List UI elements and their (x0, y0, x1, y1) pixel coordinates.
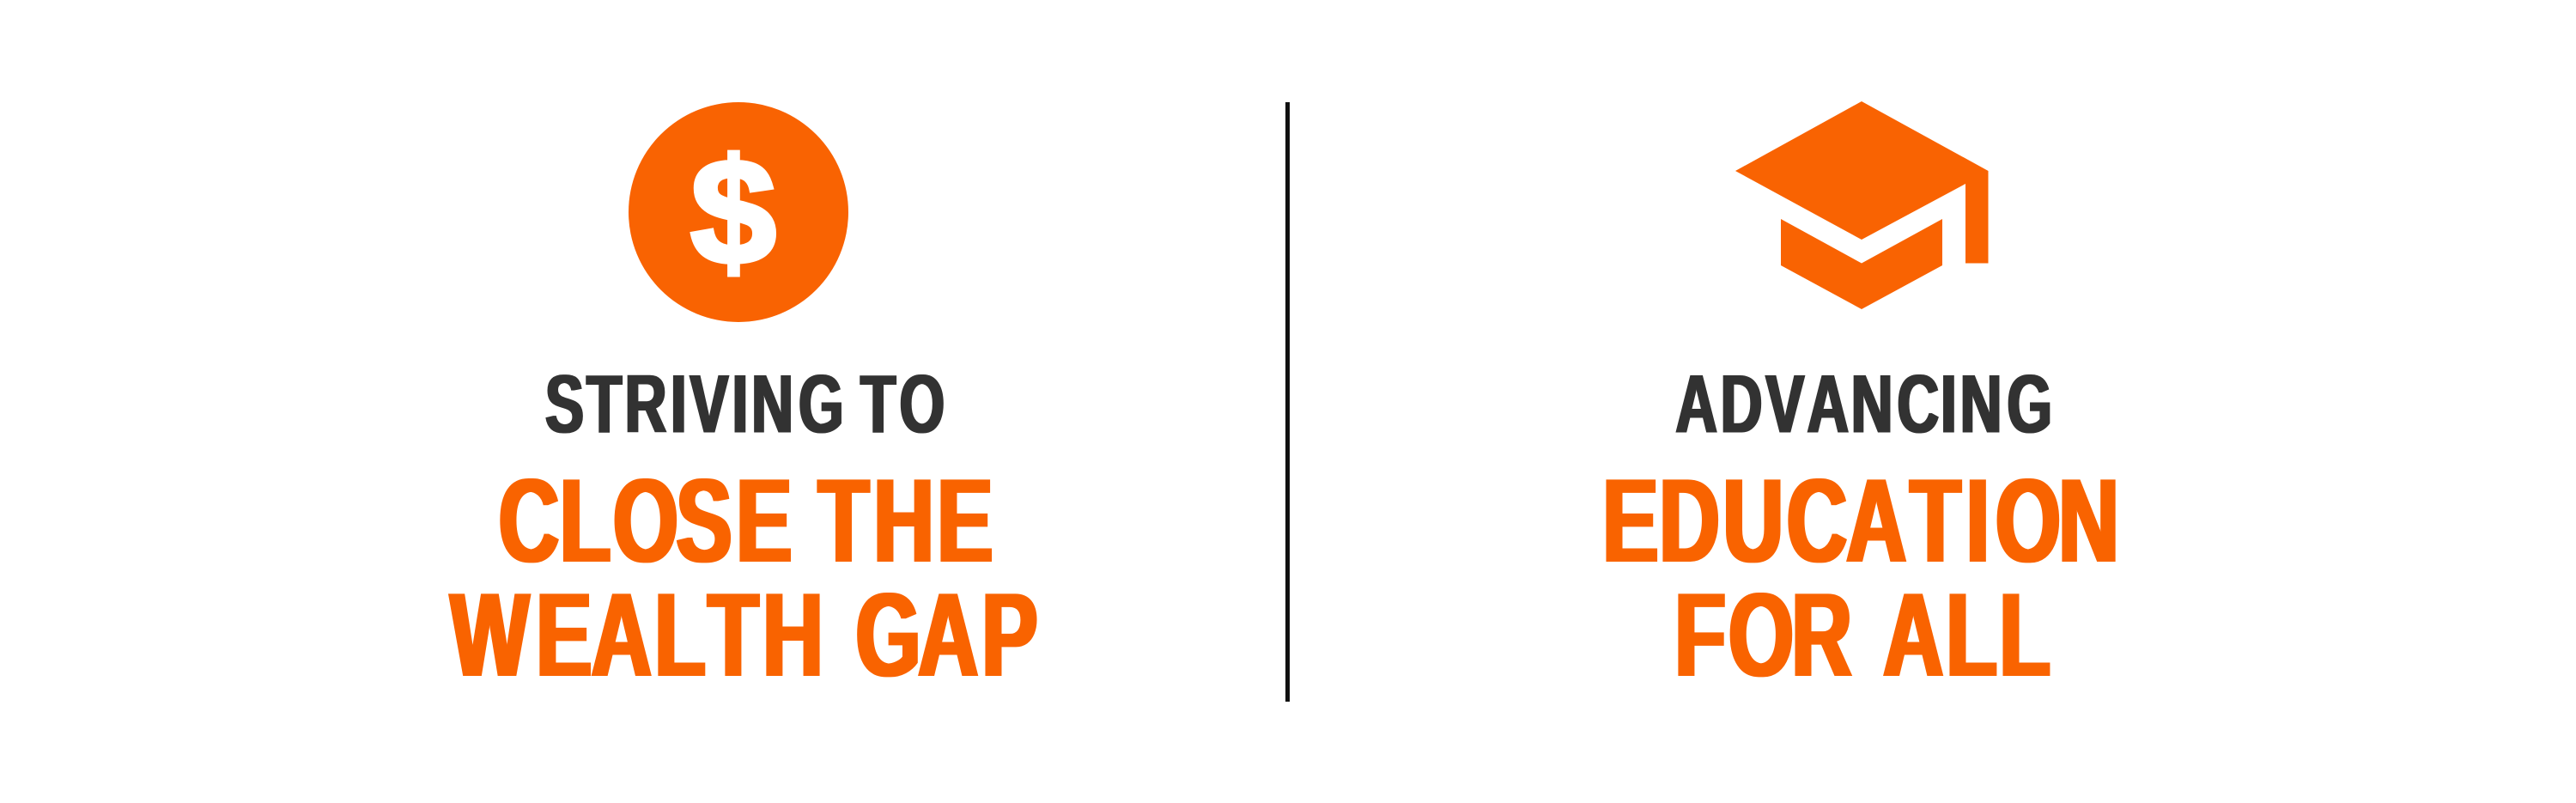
heading: education for all (1602, 454, 2119, 702)
icon: dollar coin: $ (690, 129, 776, 296)
panel: education (1602, 101, 2119, 702)
heading: close the wealth gap: CLOSE THE (499, 454, 993, 587)
icon: dollar coin (629, 102, 848, 322)
divider line (1285, 102, 1290, 702)
heading: close the wealth gap: WEALTH GAP (450, 569, 1037, 702)
heading: close the wealth gap (450, 454, 1037, 702)
icon: graduation cap (1735, 101, 1989, 309)
heading: education for all: FOR ALL (1674, 569, 2050, 702)
subheading: advancing: ADVANCING (1675, 356, 2052, 450)
subheading: striving to: STRIVING TO (545, 356, 945, 450)
heading: education for all: EDUCATION (1602, 454, 2119, 587)
panel: wealth gap (450, 102, 1037, 702)
